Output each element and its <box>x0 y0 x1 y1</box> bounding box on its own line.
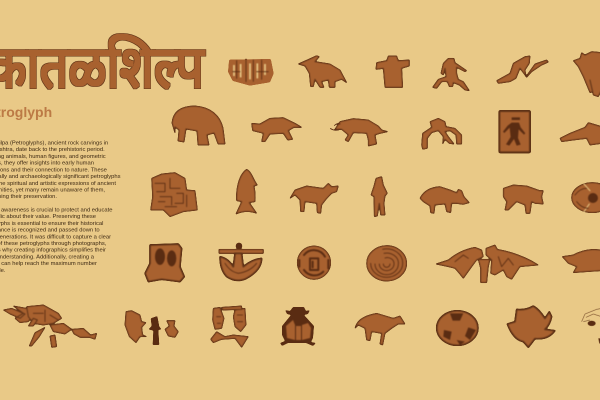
icon: bell figure <box>280 307 316 346</box>
icon: dark figure <box>148 316 162 345</box>
icon: round stone <box>437 311 478 345</box>
icon: fish <box>236 169 257 214</box>
icon: rhino <box>562 249 600 273</box>
icon: cross figure <box>376 56 409 87</box>
icon: hyena <box>503 185 543 213</box>
icon: maze block <box>151 173 197 217</box>
petroglyph collection <box>3 52 600 347</box>
icon: framed figure <box>499 111 530 152</box>
petroglyphs row 5, left part <box>3 305 248 347</box>
icon: concentric circles <box>367 246 407 281</box>
petroglyphs row 1 and 2, right part <box>229 56 409 146</box>
icon: fish chain cluster <box>3 305 97 347</box>
icon: arch figure <box>422 118 462 149</box>
icon: carved panel <box>229 58 273 85</box>
icon: bear <box>420 187 469 213</box>
icon: sketched figure <box>582 308 600 343</box>
icon: human figure <box>433 58 469 91</box>
icon: deer <box>355 313 405 345</box>
icon: twin faces <box>211 306 248 347</box>
icon: standing figure <box>371 177 387 217</box>
icon: small animal <box>165 321 178 337</box>
icon: patterned disc <box>297 246 331 279</box>
petroglyphs row 3 and 4, left part <box>145 169 338 282</box>
text block <box>0 140 121 274</box>
icon: lizard <box>560 123 600 145</box>
icon: turtle <box>507 306 555 347</box>
icon: spotted deer <box>573 52 600 97</box>
icon: tiger <box>330 119 388 146</box>
icon: animal <box>298 56 347 87</box>
icon: two-oval panel <box>145 244 184 282</box>
icon: boar upright <box>125 311 147 343</box>
icon: eye disc <box>572 183 600 213</box>
icon: elephant <box>172 106 225 145</box>
icon: crawling figure <box>497 56 548 83</box>
icon: stag <box>290 183 338 213</box>
icon: twin animals <box>436 245 538 283</box>
icon: anchor figure <box>219 243 263 280</box>
icon: boar <box>252 118 302 142</box>
